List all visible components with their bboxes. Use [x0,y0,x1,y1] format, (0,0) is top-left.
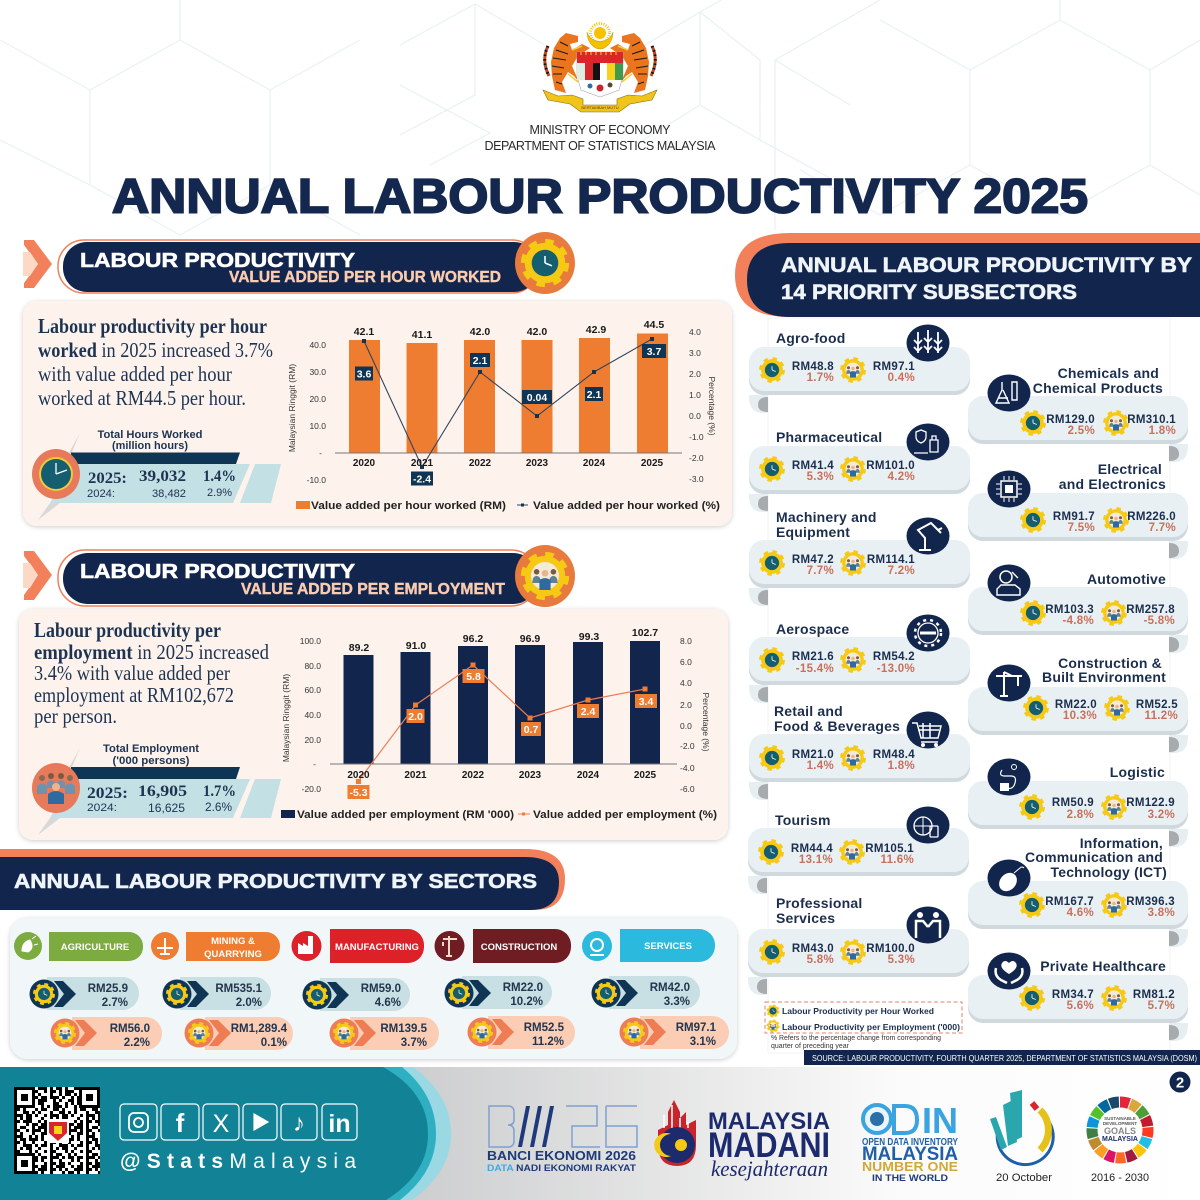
sector: agriculture: 2.2% [124,1037,150,1049]
sector: mining and quarrying: 2.0% [236,997,262,1009]
sector: agriculture: 2.7% [102,997,128,1009]
subsector: logistic [968,758,1188,847]
total hours worked: 2025: [88,470,127,487]
combo chart: value added per hour worked: 3.6 [357,368,371,380]
combo chart: value added per hour worked: -10.0 [307,475,326,485]
chart legend: Value added per employment (%) [533,809,717,821]
sector: mining and quarrying: 0.1% [261,1037,287,1049]
combo chart: value added per employment: 2020 [347,770,370,781]
logo: banci ekonomi 2026 [487,1106,637,1174]
subsector: automotive: Automotive [1087,571,1166,587]
note: percentage change: quarter of preceding year [771,1041,850,1050]
subsector: machinery and equipment: 7.7% [807,565,834,577]
sector: agriculture: AGRICULTURE [61,942,129,953]
panel: labour productivity per hour worked [23,301,732,526]
total hours worked: 2024: [87,488,115,500]
sector: services [582,929,729,1049]
combo chart: value added per hour worked: 3.7 [647,346,661,358]
section header: value added per employment [23,545,575,607]
subsector: pharmaceutical: RM41.4 [792,460,834,472]
combo chart: value added per hour worked: 41.1 [412,329,432,341]
subsector: tourism [748,806,969,894]
total hours worked: 38,482 [152,488,186,500]
text block: hour worked summary [38,314,273,410]
subsector: automotive: RM257.8 [1126,604,1175,616]
combo chart: value added per hour worked: 2.1 [473,355,487,367]
logo: open data inventory: NUMBER ONE [862,1159,958,1174]
combo chart: value added per hour worked: 10.0 [309,421,326,431]
combo chart: value added per hour worked: 30.0 [309,367,326,377]
sector: construction: 11.2% [532,1036,564,1048]
subsector: electrical and electronics: and Electronics [1059,476,1166,492]
subsector: aerospace: RM54.2 [873,651,915,663]
combo chart: value added per employment: 89.2 [349,642,369,654]
subsector: aerospace: Aerospace [776,621,849,637]
combo chart: value added per hour worked: 42.0 [470,326,490,338]
total hours worked: 1.4% [203,468,236,485]
navy bars [344,641,660,764]
ministry names [484,123,716,153]
section header: 14 priority subsectors [735,233,1200,317]
combo chart: value added per hour worked: Malaysian Ringgit (RM) [287,364,297,452]
combo chart: value added per employment: -20.0 [302,784,321,794]
combo chart: value added per hour worked: 2025 [641,458,664,469]
text block: employment summary: employment at RM102,672 [34,683,234,707]
text block: employment summary [34,618,269,728]
subsector: logistic: 2.8% [1067,809,1094,821]
subsector: automotive: RM103.3 [1045,604,1094,616]
subsector: professional services: RM100.0 [866,943,915,955]
subsector: logistic: RM122.9 [1126,797,1175,809]
combo chart: value added per hour worked: 44.5 [644,319,664,331]
logo: open data inventory: IN [922,1100,958,1141]
legend: subsector icons: Labour Productivity per Employment ('000) [782,1022,960,1032]
combo chart: value added per hour worked: -2.0 [689,453,704,463]
chart legend: Value added per hour worked (%) [533,500,720,512]
subsector: electrical and electronics: RM91.7 [1053,511,1095,523]
legend: subsector icons [765,1002,962,1033]
subsector: information communication and technology: 4.6% [1067,907,1094,919]
combo chart: value added per hour worked: 2.0 [689,369,701,379]
sector: construction: RM52.5 [524,1022,565,1034]
social media glyphs: X [213,1110,230,1138]
text block: hour worked summary: worked at RM44.5 per hour. [38,386,246,410]
combo chart: value added per employment: 4.0 [680,678,692,688]
combo chart: value added per hour worked: 2023 [526,458,549,469]
chart legend [281,809,717,821]
sector: services: RM97.1 [676,1022,717,1034]
section header: 14 priority subsectors: 14 PRIORITY SUBSECTORS [781,281,1077,304]
combo chart: value added per employment: 0.0 [680,721,692,731]
logo: sustainable development goals: SUSTAINABLE [1104,1116,1136,1121]
logo: sustainable development goals: GOALS [1104,1126,1136,1136]
combo chart: value added per employment: Percentage (%) [701,692,711,752]
logo: banci ekonomi 2026: DATA NADI EKONOMI RAKYAT [487,1163,636,1174]
total employment: 1.7% [203,783,236,800]
total employment: 16,625 [148,801,185,815]
qr code [14,1087,100,1174]
sector: services: 3.3% [664,996,690,1008]
logo: sustainable development goals: DEVELOPMENT [1103,1121,1137,1126]
logo: statistics day: 20 October [996,1172,1052,1184]
sector: agriculture [14,932,162,1050]
combo chart: value added per employment: 2022 [462,770,485,781]
sector: agriculture: RM56.0 [110,1023,150,1035]
combo chart: value added per hour worked: 2020 [353,458,376,469]
sector: mining and quarrying: RM535.1 [215,983,263,995]
sector: agriculture: RM25.9 [88,983,128,995]
logo: statistics day [990,1090,1053,1184]
subsector: tourism: Tourism [775,812,831,828]
subsector: aerospace: RM21.6 [792,651,834,663]
sector: mining and quarrying: MINING & [211,936,255,947]
total employment: 16,905 [138,783,187,800]
sector: construction: CONSTRUCTION [481,942,557,953]
subsector: professional services: Professional [776,895,862,911]
combo chart: value added per employment: 102.7 [632,627,658,639]
combo chart: value added per employment: 3.4 [639,696,653,708]
combo chart: value added per hour worked: 20.0 [309,394,326,404]
section header: value added per hour worked [23,232,575,294]
sector: services: 3.1% [690,1036,716,1048]
subsector: electrical and electronics: 7.7% [1149,522,1176,534]
line series [356,662,648,784]
subsector: professional services: RM43.0 [792,943,834,955]
note: percentage change [771,1033,941,1050]
logo: malaysia madani: MALAYSIA [708,1108,830,1135]
combo chart: value added per hour worked: 42.0 [527,326,547,338]
subsector: aerospace [749,614,970,703]
combo chart: value added per employment: 2024 [577,770,600,781]
combo chart: value added per employment: 96.9 [520,633,540,645]
combo chart: value added per hour worked: 40.0 [309,340,326,350]
sector: manufacturing: 4.6% [375,997,401,1009]
combo chart: value added per employment: -2.0 [680,741,695,751]
sector: mining and quarrying: QUARRYING [204,949,262,960]
subsector: retail and food and beverages: RM48.4 [873,749,915,761]
subsector: retail and food and beverages: 1.4% [807,760,834,772]
subsector: information communication and technology: Communication and [1025,849,1163,865]
subsector: chemicals and chemical products: 1.8% [1149,425,1176,437]
logo: sustainable development goals [1080,1090,1160,1184]
text block: employment summary: employment in 2025 increased [34,640,269,664]
subsector: private healthcare: Private Healthcare [1040,958,1166,974]
combo chart: value added per employment: 2023 [519,770,542,781]
subsector: retail and food and beverages: Retail and [774,703,843,719]
subsector: machinery and equipment: Machinery and [776,509,877,525]
chart legend: Value added per hour worked (RM) [311,500,506,512]
subsector: electrical and electronics: RM226.0 [1127,511,1176,523]
combo chart: value added per hour worked: 42.9 [586,324,606,336]
subsector: automotive: -5.8% [1143,615,1175,627]
combo chart: value added per hour worked: -3.0 [689,474,704,484]
combo chart: value added per employment: 100.0 [300,636,321,646]
subsector: professional services: 5.8% [807,954,834,966]
combo chart: value added per hour worked: 4.0 [689,327,701,337]
subsector: agro-food: 1.7% [807,372,834,384]
subsector: retail and food and beverages: 1.8% [888,760,915,772]
text block: employment summary: Labour productivity per [34,618,221,642]
combo chart: value added per employment: 20.0 [304,735,321,745]
combo chart: value added per employment: 6.0 [680,657,692,667]
page number badge: 2 [1176,1074,1184,1092]
combo chart: value added per hour worked: 1.0 [689,390,701,400]
subsector: information communication and technology: Technology (ICT) [1050,864,1167,880]
subsector: professional services: 5.3% [888,954,915,966]
crest: coat of arms of Malaysia: BERTAMBAH MUTU [581,105,619,110]
total hours worked: 2.9% [207,487,232,499]
chart legend [296,500,720,512]
total employment: ('000 persons) [112,755,190,767]
sector: construction [434,929,575,1049]
total hours worked [32,429,281,520]
ministry names: DEPARTMENT OF STATISTICS MALAYSIA [484,139,716,153]
subsector: professional services: Services [776,910,835,926]
subsector: aerospace: -15.4% [796,663,834,675]
subsector: construction and built environment: RM52.5 [1136,699,1178,711]
subsector: pharmaceutical: Pharmaceutical [776,429,882,445]
subsector: chemicals and chemical products: Chemicals and [1058,365,1159,381]
subsector: tourism: 13.1% [799,854,833,866]
combo chart: value added per employment: 2.4 [581,706,595,718]
combo chart: value added per hour worked: 2024 [583,458,606,469]
subsector panel backing [768,318,1170,1053]
page number badge [1170,1072,1190,1092]
social media glyphs: in [328,1110,351,1138]
logo: sustainable development goals: 2016 - 2030 [1091,1172,1149,1184]
subsector: construction and built environment: Construction & [1058,655,1162,671]
logo: open data inventory: IN THE WORLD [872,1173,948,1184]
combo chart: value added per employment [281,627,717,821]
combo chart: value added per hour worked: 0.0 [689,411,701,421]
section header: value added per employment: LABOUR PRODUCTIVITY [80,560,355,583]
subsector: information communication and technology: RM167.7 [1045,896,1094,908]
subsector: private healthcare [968,952,1188,1041]
sector: manufacturing [292,929,439,1050]
subsector: construction and built environment [968,655,1188,753]
combo chart: value added per employment: 80.0 [304,661,321,671]
total hours worked: Total Hours Worked [98,429,202,441]
section header: value added per hour worked: LABOUR PRODUCTIVITY [80,249,355,272]
logo: sustainable development goals: MALAYSIA [1102,1136,1138,1143]
combo chart: value added per employment: -5.3 [349,787,368,799]
total employment: 2024: [87,802,117,814]
text block: employment summary: 3.4% with value added per [34,661,230,685]
subsector: pharmaceutical: 5.3% [807,471,834,483]
subsector: agro-food: 0.4% [888,372,915,384]
subsector: electrical and electronics: Electrical [1098,461,1162,477]
ministry names: MINISTRY OF ECONOMY [530,123,671,137]
subsector: construction and built environment: 11.2% [1145,710,1178,722]
section header: value added per employment: VALUE ADDED PER EMPLOYMENT [241,581,505,598]
social media glyphs [176,1108,351,1138]
total employment: 2.6% [205,800,232,814]
combo chart: value added per employment: Malaysian Ringgit (RM) [281,674,291,762]
combo chart: value added per employment: - [313,759,316,769]
sector: services: RM42.0 [650,982,690,994]
subsector: machinery and equipment: 7.2% [888,565,915,577]
combo chart: value added per employment: 2021 [404,770,427,781]
hexagon background pattern [0,0,1200,235]
sector: manufacturing: 3.7% [401,1037,427,1049]
text block: hour worked summary: Labour productivity per hour [38,314,267,338]
sector: manufacturing: RM59.0 [361,983,401,995]
combo chart: value added per employment: 2025 [634,770,657,781]
subsector: agro-food: RM48.8 [792,361,834,373]
subsector: chemicals and chemical products [968,365,1188,462]
subsector: information communication and technology: RM396.3 [1126,896,1175,908]
subsector: tourism: RM105.1 [865,843,914,855]
subsector: logistic: 3.2% [1148,809,1175,821]
combo chart: value added per hour worked [287,319,720,512]
subsector: pharmaceutical [749,424,970,512]
section header: value added per hour worked: VALUE ADDED PER HOUR WORKED [229,269,501,286]
chart legend: Value added per employment (RM '000) [297,809,514,821]
logo: banci ekonomi 2026: BANCI EKONOMI 2026 [487,1149,636,1163]
sector: manufacturing: RM139.5 [380,1023,428,1035]
text block: hour worked summary: worked in 2025 increased 3.7% [38,338,273,362]
total employment [32,743,281,835]
subsector: machinery and equipment: RM114.1 [867,554,915,566]
combo chart: value added per hour worked: 2021 [411,458,434,469]
sector: construction: RM22.0 [503,982,543,994]
subsector: private healthcare: RM81.2 [1133,989,1175,1001]
text block: employment summary: per person. [34,704,117,728]
text block: hour worked summary: with value added per hour [38,362,232,386]
subsector: automotive: -4.8% [1062,615,1094,627]
subsector: pharmaceutical: RM101.0 [866,460,915,472]
sector: mining and quarrying [151,932,293,1050]
combo chart: value added per employment: -6.0 [680,784,695,794]
subsector: pharmaceutical: 4.2% [888,471,915,483]
total hours worked: (million hours) [112,440,188,452]
combo chart: value added per employment: 40.0 [304,710,321,720]
subsector: retail and food and beverages: Food & Beverages [774,718,900,734]
panel: labour productivity per employment [19,609,728,840]
source bar [804,1050,1200,1065]
logo: open data inventory: MALAYSIA [862,1144,958,1165]
social media glyphs: f [176,1108,185,1138]
logo: open data inventory: OPEN DATA INVENTORY [862,1137,958,1148]
combo chart: value added per employment: 8.0 [680,636,692,646]
subsector: electrical and electronics [968,461,1188,559]
subsector: private healthcare: 5.7% [1148,1000,1175,1012]
combo chart: value added per hour worked: -1.0 [689,432,704,442]
logo: malaysia madani: MADANI [708,1126,830,1165]
subsector: agro-food [749,324,970,413]
combo chart: value added per hour worked: 2022 [469,458,492,469]
note: percentage change: % Refers to the percentage change from corresponding [771,1033,941,1042]
total employment: 2025: [87,785,128,802]
subsector: logistic: RM50.9 [1052,797,1094,809]
subsector: machinery and equipment: Equipment [776,524,850,540]
title: ANNUAL LABOUR PRODUCTIVITY 2025 [112,170,1088,224]
footer [0,1067,1200,1200]
subsector: construction and built environment: 10.3% [1063,710,1097,722]
combo chart: value added per hour worked: 0.04 [527,392,547,404]
subsector: machinery and equipment [749,509,970,606]
combo chart: value added per employment: 99.3 [579,631,599,643]
combo chart: value added per employment: 2.0 [408,711,423,723]
combo chart: value added per hour worked: Percentage (%) [707,376,717,436]
subsector: information communication and technology [968,835,1188,947]
line series [362,337,654,469]
subsector: tourism: RM44.4 [791,843,833,855]
panel: sectors [10,918,737,1059]
sector: services: SERVICES [644,941,692,952]
legend: subsector icons: Labour Productivity per Hour Worked [782,1006,934,1016]
subsector: aerospace: -13.0% [877,663,915,675]
subsector: electrical and electronics: 7.5% [1068,522,1095,534]
combo chart: value added per employment: 5.8 [466,671,481,683]
crest: coat of arms of Malaysia [543,24,657,112]
handle: @Stats Malaysia [120,1150,356,1173]
subsector: chemicals and chemical products: Chemical Products [1033,380,1163,396]
combo chart: value added per employment: 60.0 [304,685,321,695]
subsector: retail and food and beverages [749,703,970,800]
subsector: agro-food: Agro-food [776,330,845,346]
combo chart: value added per hour worked: 3.0 [689,348,701,358]
section header: by sectors [0,849,565,910]
orange bars [349,334,668,453]
combo chart: value added per employment: 91.0 [406,640,426,652]
sector: manufacturing: MANUFACTURING [335,942,419,953]
combo chart: value added per hour worked: - [319,448,322,458]
subsector: chemicals and chemical products: RM310.1 [1127,414,1176,426]
subsector: construction and built environment: RM22.0 [1055,699,1097,711]
subsector: logistic: Logistic [1110,764,1165,780]
subsector: professional services [748,895,969,995]
subsector: chemicals and chemical products: RM129.0 [1046,414,1095,426]
combo chart: value added per hour worked: 2.1 [587,389,601,401]
logo: malaysia madani: kesejahteraan [711,1156,828,1181]
social media glyphs: ♪ [293,1110,305,1137]
combo chart: value added per employment: 96.2 [463,633,483,645]
subsector: machinery and equipment: RM47.2 [792,554,834,566]
combo chart: value added per employment: 2.0 [680,700,692,710]
social media icons [120,1104,357,1140]
combo chart: value added per hour worked: 42.1 [354,326,374,338]
combo chart: value added per employment: -4.0 [680,763,695,773]
subsector: agro-food: RM97.1 [873,361,915,373]
subsector: construction and built environment: Built Environment [1042,669,1166,685]
subsector: retail and food and beverages: RM21.0 [792,749,834,761]
logo: malaysia madani [654,1100,830,1181]
logo: open data inventory [862,1100,958,1184]
total employment: Total Employment [103,743,199,755]
total hours worked: 39,032 [139,468,186,485]
subsector: information communication and technology: 3.8% [1148,907,1175,919]
subsector: private healthcare: 5.6% [1067,1000,1094,1012]
subsector: automotive [968,564,1188,653]
subsector: tourism: 11.6% [881,854,914,866]
section header: 14 priority subsectors: ANNUAL LABOUR PRODUCTIVITY BY [781,254,1192,277]
subsector: chemicals and chemical products: 2.5% [1068,425,1095,437]
subsector: information communication and technology: Information, [1080,835,1163,851]
section header: by sectors: ANNUAL LABOUR PRODUCTIVITY BY SECTORS [14,871,537,893]
subsector: private healthcare: RM34.7 [1052,989,1094,1001]
sector: mining and quarrying: RM1,289.4 [231,1023,288,1035]
combo chart: value added per employment: 0.7 [524,724,538,736]
combo chart: value added per hour worked: -2.4 [413,474,431,486]
sector: construction: 10.2% [510,996,543,1008]
